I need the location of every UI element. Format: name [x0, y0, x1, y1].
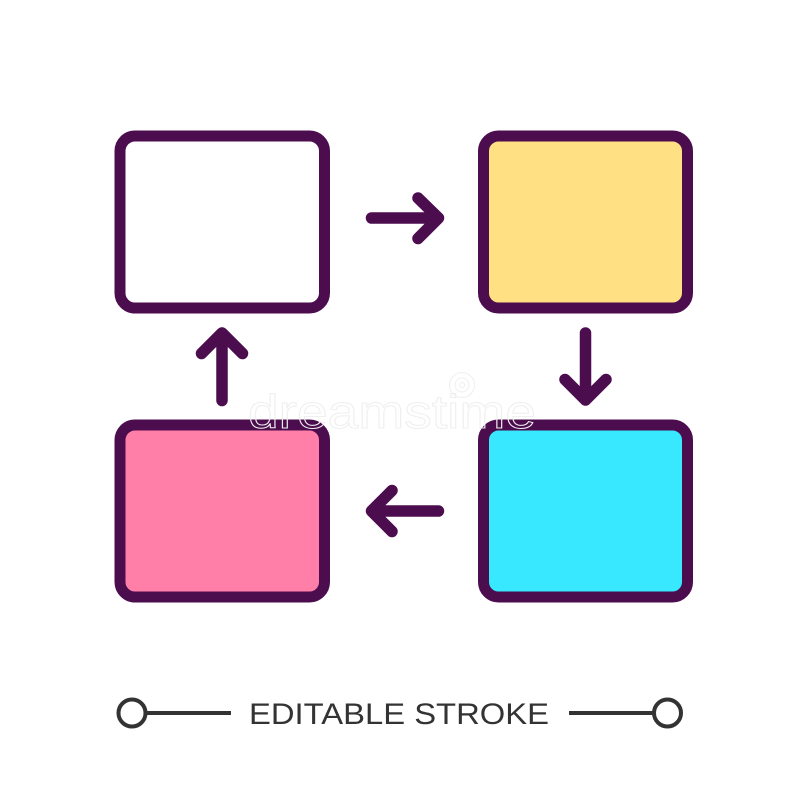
arrow: up — [202, 333, 242, 400]
panel: cyan box, bottom right — [484, 425, 688, 597]
arrow: right — [372, 198, 438, 238]
panel: pink box, bottom left — [120, 425, 324, 597]
arrow: left — [372, 490, 438, 532]
panel: yellow box, top right — [484, 136, 688, 308]
icon: left stroke handle — [118, 700, 231, 726]
icon: right stroke handle — [569, 700, 681, 726]
panel: white box, top left — [120, 136, 324, 308]
arrow: down — [565, 333, 606, 400]
watermark — [248, 372, 536, 438]
caption: editable stroke: EDITABLE STROKE — [249, 698, 549, 731]
watermark: dreamstime — [248, 385, 536, 438]
